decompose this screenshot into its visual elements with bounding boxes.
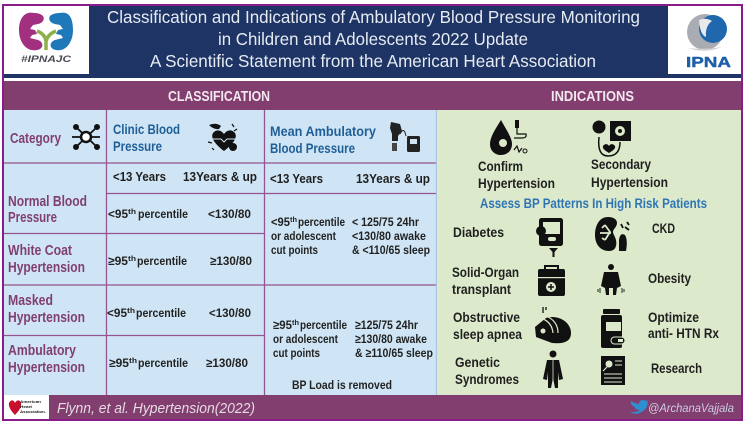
label: ambulatory: Hypertension (8, 360, 85, 376)
label: secondary: Secondary (591, 157, 651, 172)
block: above threshold: ≥130/80 awake (355, 332, 427, 346)
icon: network (72, 124, 100, 150)
row: normal: th (128, 209, 136, 216)
icon: blood drop (490, 120, 527, 155)
section band (4, 81, 741, 110)
footer bar (4, 395, 741, 419)
title: Classification and Indications of Ambulatory Blood Pressure Monitoring (107, 7, 640, 27)
block: above threshold (273, 318, 433, 360)
row: white coat: ≥130/80 (210, 254, 252, 268)
block: below threshold: & <110/65 sleep (352, 243, 430, 257)
label: ambulatory: Ambulatory (8, 343, 76, 359)
label: transplant (452, 265, 519, 297)
label: obesity: Obesity (648, 271, 691, 286)
block: above threshold: percentile (300, 318, 347, 332)
column: mean ambulatory blood pressure (270, 122, 433, 392)
icon: twitter bird (630, 400, 648, 414)
title: A Scientific Statement from the American Heart Association (150, 51, 596, 71)
heading: classification: CLASSIFICATION (168, 89, 270, 105)
heading: mean ambulatory: Mean Ambulatory (270, 123, 376, 139)
row: white coat (108, 254, 252, 268)
block: above threshold: & ≥110/65 sleep (355, 346, 433, 360)
label: diabetes: Diabetes (453, 225, 504, 240)
block: below threshold: percentile (298, 215, 345, 229)
row labels (270, 171, 430, 186)
row: masked: <95 (107, 306, 127, 320)
label: research: Research (651, 361, 702, 376)
row labels: 13Years & up (183, 169, 257, 184)
row: white coat: th (128, 256, 136, 263)
label: white coat (8, 243, 85, 276)
label: secondary: Hypertension (591, 175, 668, 190)
label: confirm: Confirm (478, 159, 523, 174)
label: optimize: anti- HTN Rx (648, 326, 719, 341)
block: above threshold: ≥125/75 24hr (355, 318, 418, 332)
row: normal: <130/80 (208, 207, 251, 221)
row: ambulatory: ≥95 (109, 356, 129, 370)
block: below threshold: < 125/75 24hr (352, 215, 419, 229)
column: category (8, 124, 100, 376)
row: ambulatory (109, 356, 248, 370)
row: normal (108, 207, 251, 221)
label: genetic: Genetic (455, 355, 500, 370)
heading: category: Category (10, 131, 61, 147)
label: genetic: Syndromes (455, 372, 519, 387)
label: normal (8, 194, 87, 226)
logo: IPNA: IPNA (686, 54, 731, 71)
block: above threshold: ≥95 (273, 318, 292, 332)
logo: IPNAJC kidneys: #IPNAJC (21, 54, 71, 65)
row: white coat: percentile (137, 254, 187, 268)
label: optimize: Optimize (648, 310, 699, 325)
row: ambulatory: percentile (138, 356, 188, 370)
block: below threshold: cut points (271, 243, 318, 257)
subheading: assess: Assess BP Patterns In High Risk Patients (480, 196, 707, 211)
label: sleep apnea: Obstructive (453, 310, 520, 325)
block: below threshold: <130/80 awake (352, 229, 426, 243)
title: in Children and Adolescents 2022 Update (218, 29, 528, 49)
citation: Flynn, et al. Hypertension(2022) (57, 401, 255, 417)
label: confirm: Hypertension (478, 176, 555, 191)
row labels: <13 Years (270, 171, 323, 186)
block: below threshold (271, 215, 430, 257)
label: masked: Hypertension (8, 310, 85, 326)
row: white coat: ≥95 (108, 254, 128, 268)
label: transplant: transplant (452, 282, 511, 297)
logo: IPNAJC kidneys (4, 6, 89, 74)
row: ambulatory: ≥130/80 (206, 356, 248, 370)
heading: indications: INDICATIONS (551, 89, 634, 105)
label: masked: Masked (8, 293, 53, 309)
label: masked (8, 293, 85, 326)
label: ckd: CKD (652, 221, 675, 236)
logo: american heart association: Heart (20, 404, 33, 409)
logo: american heart association: Association. (20, 409, 46, 414)
row labels: 13Years & up (356, 171, 430, 186)
label: ambulatory (8, 343, 85, 376)
icon: research document (601, 356, 625, 385)
icon: obesity (598, 264, 624, 295)
row: masked: <130/80 (209, 306, 251, 320)
panel: classification table (4, 110, 437, 395)
heading: mean ambulatory (270, 123, 376, 156)
icon: airway (535, 307, 571, 343)
row: masked: percentile (136, 306, 186, 320)
icon: arm monitor (390, 122, 420, 152)
heading: clinic: Pressure (113, 138, 162, 154)
icon: pill bottle (601, 309, 625, 348)
label: optimize (648, 310, 719, 341)
row: masked: th (127, 308, 135, 315)
block: above threshold: cut points (273, 346, 320, 360)
block: below threshold: or adolescent (271, 229, 336, 243)
row labels (113, 169, 257, 184)
label: white coat: Hypertension (8, 260, 85, 276)
label: white coat: White Coat (8, 243, 72, 259)
block: above threshold: th (292, 320, 299, 327)
icon: kidney (595, 217, 629, 251)
heading: clinic: Clinic Blood (113, 121, 180, 137)
icon: medical case (538, 266, 565, 296)
panel: indications (437, 110, 741, 395)
title (107, 7, 640, 71)
header banner (4, 6, 741, 78)
row: normal: <95 (108, 207, 128, 221)
icon: heart cuff (208, 124, 237, 151)
icon: human figure (543, 350, 563, 388)
block: above threshold: or adolescent (273, 332, 338, 346)
label: genetic (455, 355, 519, 387)
heading: clinic (113, 121, 180, 154)
label: normal: Pressure (8, 210, 57, 226)
icon: cuff monitor (592, 120, 631, 156)
heading: mean ambulatory: Blood Pressure (270, 140, 355, 156)
block: below threshold: th (290, 217, 297, 224)
row: normal: percentile (138, 207, 188, 221)
note: bp load: BP Load is removed (292, 378, 392, 392)
logo: IPNA (668, 6, 741, 74)
label: sleep apnea (453, 310, 522, 342)
column: clinic blood pressure (107, 121, 257, 370)
label: confirm (478, 159, 555, 191)
icon: glucose meter (536, 218, 563, 257)
label: sleep apnea: sleep apnea (453, 327, 522, 342)
row: masked (107, 306, 251, 320)
label: transplant: Solid-Organ (452, 265, 519, 280)
row labels: <13 Years (113, 169, 166, 184)
logo: american heart association (4, 395, 49, 419)
handle: @ArchanaVajjala (648, 403, 734, 415)
row: ambulatory: th (129, 358, 137, 365)
block: below threshold: <95 (271, 215, 290, 229)
label: normal: Normal Blood (8, 194, 87, 210)
label: secondary (591, 157, 668, 190)
logo: american heart association: American (20, 399, 42, 404)
